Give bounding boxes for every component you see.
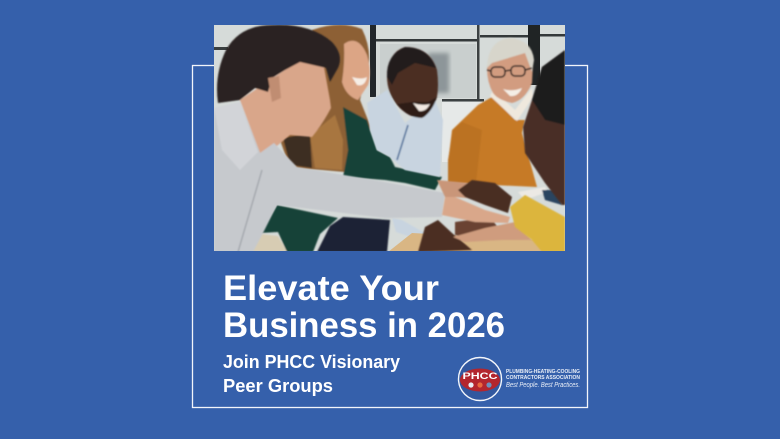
man in orange sweater <box>448 38 537 187</box>
title: Business in 2026 <box>223 306 505 345</box>
logo badge: PHCC <box>462 371 498 382</box>
outline frame <box>192 66 588 408</box>
man in grey shirt, foreground <box>214 25 445 252</box>
PHCC logo <box>458 358 580 400</box>
photo: team stacking hands <box>214 25 565 252</box>
man in blue shirt <box>367 47 443 240</box>
subtitle: Peer Groups <box>223 376 333 396</box>
title <box>223 269 505 345</box>
window background <box>214 25 565 251</box>
person in yellow, foreground right <box>510 50 565 252</box>
table <box>388 233 545 252</box>
logo wordmark: PLUMBING-HEATING-COOLING <box>506 369 580 375</box>
logo wordmark: CONTRACTORS ASSOCIATION <box>506 375 580 381</box>
stacked hands <box>418 180 562 252</box>
subtitle <box>223 352 400 396</box>
logo wordmark: Best People. Best Practices. <box>506 382 580 389</box>
woman <box>242 25 442 252</box>
title: Elevate Your <box>223 269 439 308</box>
logo wordmark <box>506 369 580 389</box>
subtitle: Join PHCC Visionary <box>223 352 400 372</box>
